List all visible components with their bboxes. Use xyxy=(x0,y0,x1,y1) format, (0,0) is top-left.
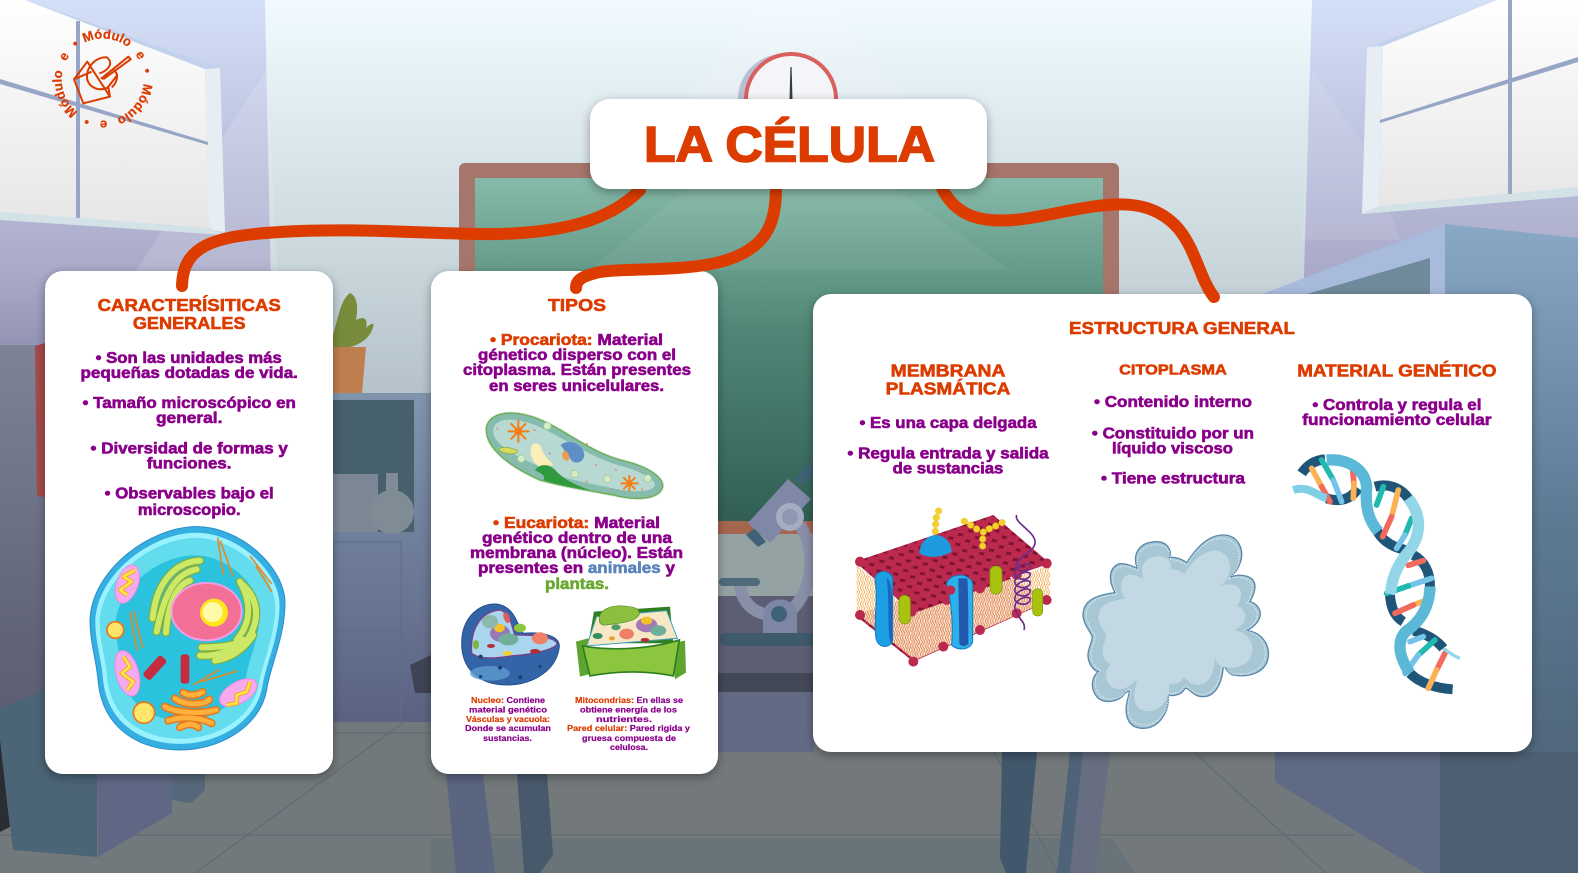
column: membrana plasmática: de sustancias xyxy=(893,461,1004,478)
caption: mitocondrias y pared: obtiene energía de los xyxy=(580,704,677,714)
column: citoplasma: CITOPLASMA xyxy=(1119,362,1227,378)
right side wall xyxy=(1302,0,1578,343)
icon: animal cell cutaway xyxy=(462,604,559,685)
icon: animal cell xyxy=(90,527,285,750)
connector: características xyxy=(182,190,640,286)
text block: características list: • Observables bajo el xyxy=(105,486,274,503)
connector: tipos xyxy=(576,188,776,288)
column: citoplasma: líquido viscoso xyxy=(1112,440,1233,457)
connector: estructura xyxy=(942,188,1214,297)
heading: tipos: TIPOS xyxy=(548,295,606,315)
table legs xyxy=(446,752,1110,873)
icon: cytoplasm blob xyxy=(1083,535,1268,728)
column: citoplasma xyxy=(1092,362,1254,488)
caption: mitocondrias y pared: Mitocondrias: En ellas se xyxy=(575,695,683,705)
column: membrana plasmática: PLASMÁTICA xyxy=(886,378,1011,399)
text block: procariota: en seres unicelulares. xyxy=(489,378,664,395)
logo icon: paper and pen xyxy=(74,57,131,103)
text block: eucariota: membrana (núcleo). Están xyxy=(470,545,683,562)
panel: características generales xyxy=(45,271,333,774)
text block: procariota: génetico disperso con el xyxy=(478,347,676,364)
text block: procariota: • Procariota: Material xyxy=(490,332,663,349)
text block: características list: • Tamaño microscópico en xyxy=(83,395,296,412)
red panel xyxy=(35,343,45,497)
connector lines xyxy=(182,188,1214,297)
panel: estructura general xyxy=(813,294,1532,752)
caption: núcleo y vacuola xyxy=(465,695,551,743)
title: LA CÉLULA xyxy=(644,116,935,172)
text block: características list: • Son las unidades más xyxy=(96,350,282,367)
column: citoplasma: • Constituido por un xyxy=(1092,425,1254,442)
caption: núcleo y vacuola: material genético xyxy=(469,704,547,714)
column: material genético: funcionamiento celular xyxy=(1302,412,1491,429)
text block: características list: • Diversidad de formas y xyxy=(91,440,288,457)
blackboard xyxy=(459,163,1119,535)
text block: características list: microscopio. xyxy=(138,502,241,519)
microscope xyxy=(719,464,816,646)
text block: características list: funciones. xyxy=(147,455,231,472)
icon: DNA helix xyxy=(1293,459,1460,689)
right lower cabinet xyxy=(1275,752,1578,873)
column: material genético: MATERIAL GENÉTICO xyxy=(1297,359,1497,380)
column: membrana plasmática: • Regula entrada y salida xyxy=(847,445,1049,462)
caption: núcleo y vacuola: Nucleo: Contiene xyxy=(471,695,545,705)
caption: mitocondrias y pared: nutrientes. xyxy=(596,714,652,724)
text block: eucariota: presentes en animales y xyxy=(478,560,675,577)
caption: mitocondrias y pared: Pared celular: Pared rigida y xyxy=(567,723,690,733)
caption: núcleo y vacuola: Vásculas y vacuola: xyxy=(466,714,550,724)
column: membrana plasmática: • Es una capa delgada xyxy=(859,415,1037,432)
icon: plant cell xyxy=(576,606,686,679)
column: material genético xyxy=(1297,359,1497,429)
caption: núcleo y vacuola: Donde se acumulan xyxy=(465,723,551,733)
text block: características list xyxy=(81,350,298,519)
column: citoplasma: • Tiene estructura xyxy=(1101,471,1245,488)
floor xyxy=(0,722,1355,873)
text block: eucariota: plantas. xyxy=(545,576,609,593)
left window xyxy=(0,0,225,235)
text block: eucariota: • Eucariota: Material xyxy=(493,515,660,532)
right window xyxy=(1362,0,1578,214)
back wall xyxy=(260,0,1320,560)
logo Módulo e xyxy=(52,28,152,128)
right cabinet xyxy=(1262,224,1578,873)
text block: eucariota: genético dentro de una xyxy=(482,530,672,547)
text block: eucariota xyxy=(470,515,683,593)
plant and shelf xyxy=(333,293,431,723)
logo circular text: Módulo e • Módulo e • Módulo e • xyxy=(52,28,152,128)
text block: características list: pequeñas dotadas de vida. xyxy=(81,365,298,382)
left side wall xyxy=(0,0,283,873)
icon: paramecium xyxy=(486,413,663,498)
counter xyxy=(718,534,814,752)
icon: cell membrane xyxy=(855,508,1052,667)
text block: procariota: citoplasma. Están presentes xyxy=(463,362,691,379)
column: membrana plasmática: MEMBRANA xyxy=(891,360,1006,380)
panel: tipos xyxy=(431,271,718,774)
text block: procariota xyxy=(463,332,691,395)
column: material genético: • Controla y regula el xyxy=(1312,397,1481,414)
caption: mitocondrias y pared xyxy=(567,695,690,752)
title box xyxy=(590,99,987,189)
left lower cabinet xyxy=(0,690,205,857)
light beam xyxy=(560,0,1040,280)
heading: estructura general: ESTRUCTURA GENERAL xyxy=(1069,318,1295,338)
column: citoplasma: • Contenido interno xyxy=(1094,394,1252,411)
heading: características: CARACTERÍSITICAS xyxy=(98,294,281,315)
text block: características list: general. xyxy=(156,410,222,427)
heading: características: GENERALES xyxy=(133,313,246,333)
clock xyxy=(738,54,836,144)
caption: mitocondrias y pared: gruesa compuesta de xyxy=(582,733,676,743)
heading: características xyxy=(98,294,281,333)
caption: núcleo y vacuola: sustancias. xyxy=(483,733,532,743)
column: membrana plasmática xyxy=(847,360,1049,478)
caption: mitocondrias y pared: celulosa. xyxy=(610,742,648,752)
